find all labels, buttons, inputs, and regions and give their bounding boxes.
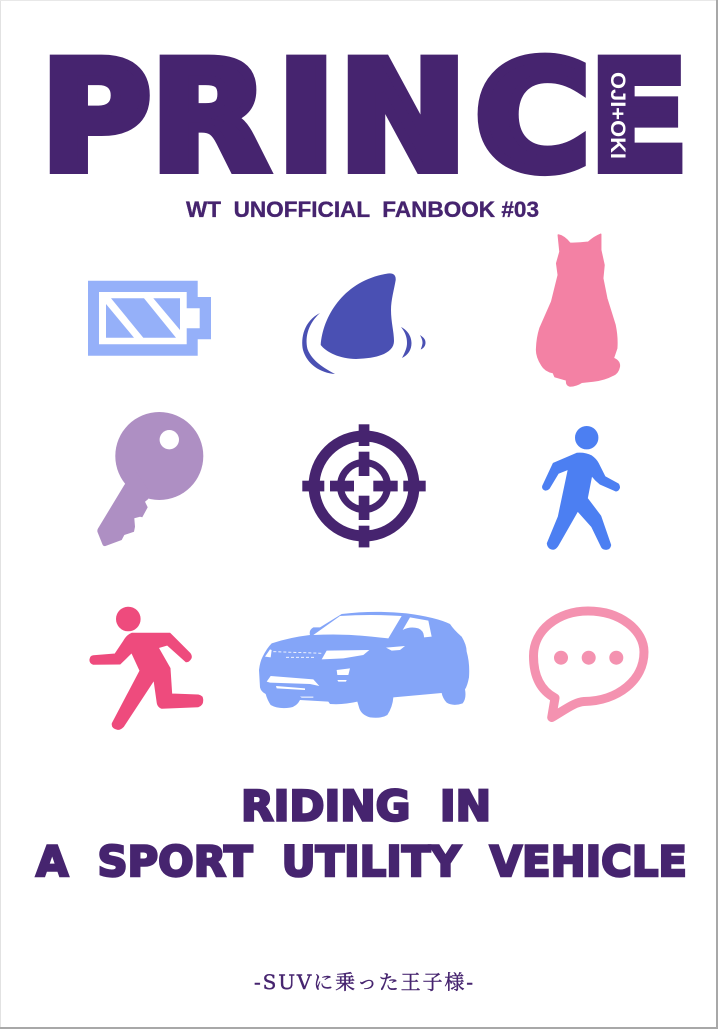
icon: cat silhouette bbox=[537, 234, 619, 386]
icon: walking person bbox=[543, 426, 620, 549]
icon: key bbox=[97, 412, 203, 546]
subtitle: WT UNOFFICIAL FANBOOK #03 bbox=[186, 197, 539, 222]
japanese subtitle: -SUVに乗った王子様- bbox=[254, 970, 473, 994]
icon: crosshair target bbox=[302, 424, 426, 547]
label: OJI+OKI on the E: OJI+OKI bbox=[606, 72, 629, 159]
icon: SUV car bbox=[259, 612, 469, 718]
title: PRINCE logo: C bbox=[475, 31, 591, 205]
title: PRINCE logo: E bbox=[589, 30, 688, 205]
icon: running person bbox=[90, 607, 203, 729]
icon: speech bubble bbox=[534, 611, 644, 718]
title: PRINCE logo: I bbox=[277, 31, 336, 205]
title: PRINCE logo: P bbox=[41, 31, 151, 205]
title: PRINCE logo: R bbox=[151, 29, 269, 205]
title: PRINCE logo: N bbox=[339, 29, 467, 205]
heading: riding in a sport utility vehicle: RIDING IN bbox=[241, 782, 491, 830]
title: PRINCE logo bbox=[41, 29, 688, 205]
icon: battery bbox=[88, 281, 211, 356]
icon: shark fin bbox=[302, 273, 426, 374]
heading: riding in a sport utility vehicle bbox=[36, 782, 687, 886]
heading: riding in a sport utility vehicle: A SPORT UTILITY VEHICLE bbox=[36, 837, 687, 886]
